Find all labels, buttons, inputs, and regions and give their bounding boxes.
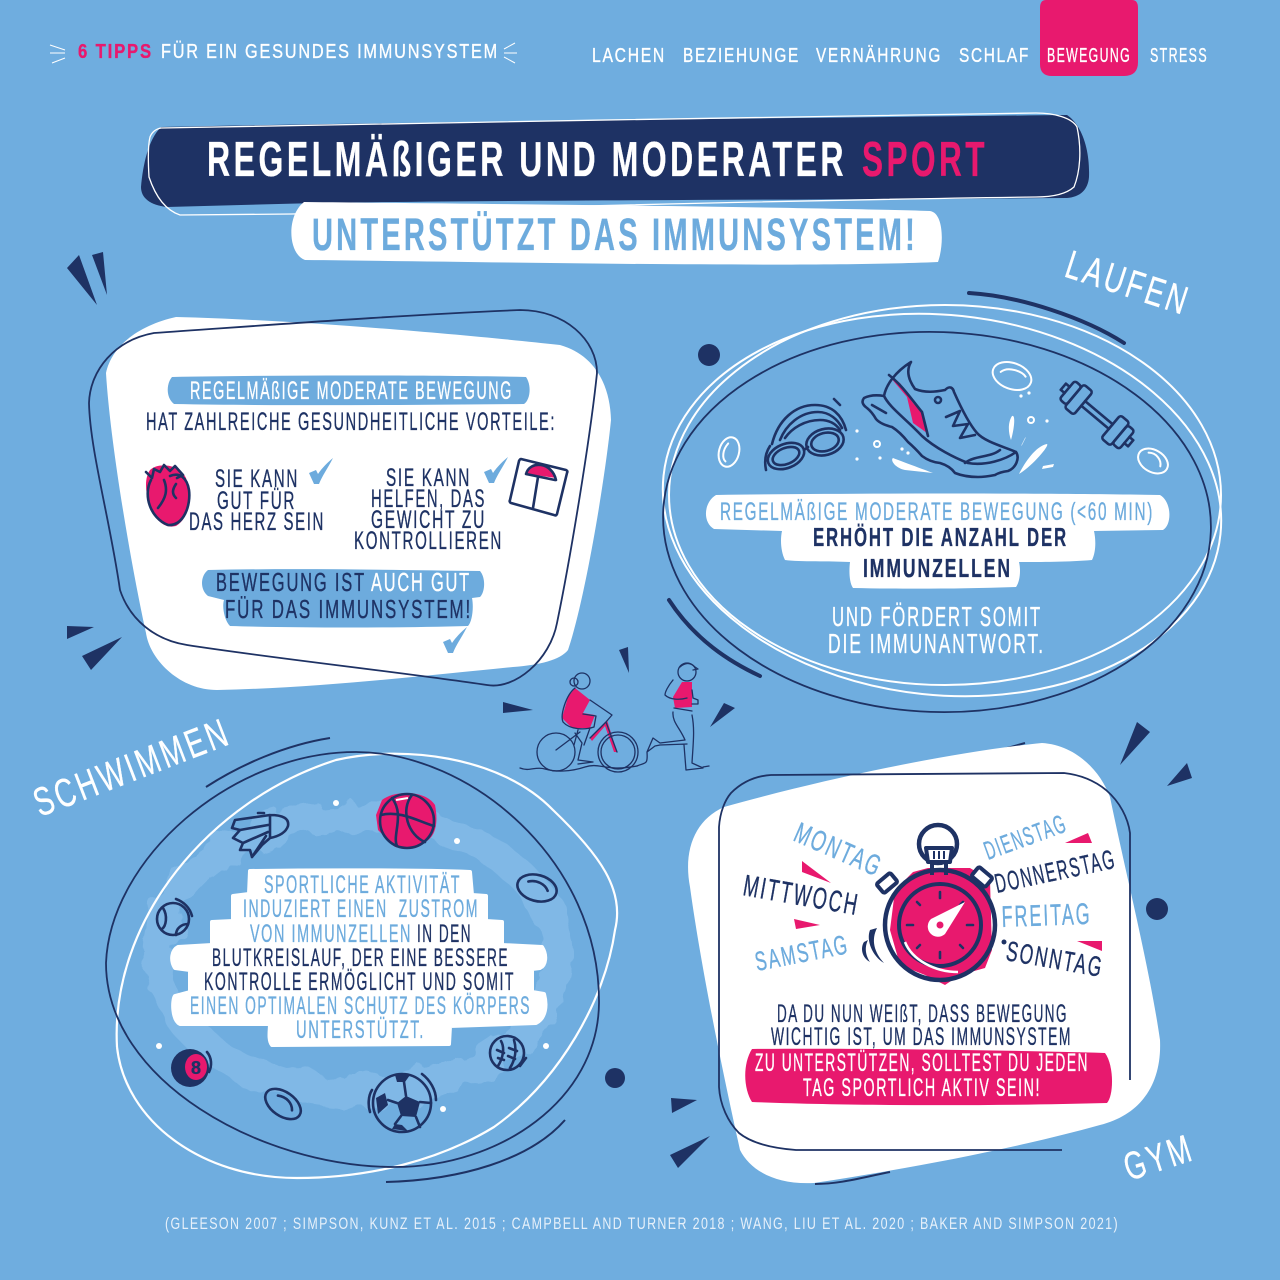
icon: shuttlecock (232, 813, 288, 857)
label: Laufen: LAUFEN (1060, 243, 1196, 324)
text block: white steps: SPORTLICHE AKTIVITÄT (264, 871, 461, 899)
panel outline (719, 773, 1130, 1150)
closing text (771, 1000, 1072, 1051)
text: heart benefit: SIE KANN (215, 465, 299, 493)
highlighted heading: REGELMÄßIGE MODERATE BEWEGUNG (190, 377, 513, 405)
panel shape: white blob (688, 743, 1160, 1183)
highlighted message (202, 567, 484, 628)
text block: white steps: IN DEN (417, 920, 472, 948)
subtitle: UNTERSTÜTZT DAS IMMUNSYSTEM! (312, 209, 918, 260)
icon: blood cell (260, 1083, 306, 1125)
navigation tabs: STRESS (1150, 45, 1208, 67)
text block: white steps (172, 870, 545, 1045)
text block: white steps: BLUTKREISLAUF, DER EINE BESSERE (212, 944, 509, 972)
panel: immune cells (644, 287, 1240, 723)
navigation tabs: BEWEGUNG (1047, 45, 1131, 67)
navigation tabs: LACHEN (592, 45, 666, 67)
text: weight benefit: KONTROLLIEREN (354, 527, 503, 555)
mottled ring (158, 817, 558, 1093)
icon: basketball (376, 793, 436, 848)
panel: every day (688, 743, 1160, 1184)
decorative dots (605, 344, 1168, 1088)
highlighted message: BEWEGUNG IST (216, 567, 366, 597)
header: series title: 6 TIPPS (78, 41, 153, 63)
weekday labels: MONTAG (789, 817, 887, 884)
icon: goggles (764, 399, 847, 474)
title banner (141, 113, 1089, 215)
icon: blood cells (715, 357, 1172, 479)
icon: check mark (309, 458, 333, 484)
dot (1002, 940, 1006, 944)
navigation tabs: VERNÄHRUNG (816, 45, 942, 67)
outline peeking behind blob (815, 743, 1025, 1184)
icon: check mark (443, 627, 467, 653)
icon: soccer ball (369, 1074, 436, 1132)
panel outline (89, 310, 597, 686)
text block: white steps: UNTERSTÜTZT. (296, 1016, 425, 1044)
panel outlines (106, 738, 617, 1182)
icon: splash marks (855, 391, 1054, 474)
runner (637, 663, 709, 770)
text block: white steps: EINEN OPTIMALEN SCHUTZ DES KÖRPERS (190, 992, 531, 1020)
text: highlight line: IMMUNZELLEN (863, 553, 1012, 583)
title banner: SPORT (862, 133, 988, 187)
pink callout: TAG SPORTLICH AKTIV SEIN! (803, 1074, 1041, 1102)
icon: check mark (484, 457, 508, 483)
text: weight benefit (354, 464, 503, 555)
text block: white steps: VON IMMUNZELLEN (250, 920, 412, 948)
panel: benefits (89, 310, 611, 690)
text: consequence: DIE IMMUNANTWORT. (828, 628, 1045, 659)
weekday labels: DIENSTAG (980, 808, 1071, 866)
highlighted message: AUCH GUT (371, 567, 471, 597)
icon: dumbbell (1054, 375, 1140, 455)
icon: eight ball: 8 (191, 1058, 203, 1078)
pink callout (745, 1049, 1112, 1105)
panel: immune flow (106, 738, 617, 1182)
navigation tabs: SCHLAF (959, 45, 1030, 67)
icon: heart (146, 465, 189, 527)
icon: running shoe (863, 362, 1018, 477)
text: consequence: UND FÖRDERT SOMIT (832, 601, 1042, 632)
text: heart benefit: GUT FÜR (217, 487, 296, 515)
text: weight benefit: SIE KANN (386, 464, 471, 492)
icon: blood cell (514, 870, 560, 906)
text block: white steps: INDUZIERT EINEN ZUSTROM (243, 895, 479, 923)
weekday labels: MITTWOCH (741, 869, 862, 922)
header: series title: FÜR EIN GESUNDES IMMUNSYSTEM (161, 41, 499, 63)
icon: scale (510, 459, 567, 515)
subtitle (291, 202, 942, 265)
text: highlight line: ERHÖHT DIE ANZAHL DER (813, 522, 1068, 552)
weekday labels: SONNTAG (1004, 935, 1106, 983)
title banner: REGELMÄßIGER UND MODERATER (207, 133, 847, 187)
decorative triangles top left (67, 252, 107, 305)
text: heart benefit: DAS HERZ SEIN (189, 508, 325, 536)
label: Gym: GYM (1118, 1127, 1199, 1190)
decorative triangles left (67, 626, 122, 670)
text: highlight line (706, 494, 1169, 589)
icon: stopwatch (862, 825, 995, 985)
decorative triangles right (1120, 722, 1192, 786)
panel outlines (644, 287, 1240, 723)
panel shape: white blob (106, 317, 611, 690)
heading line: HAT ZAHLREICHE GESUNDHEITLICHE VORTEILE: (146, 408, 556, 436)
text block: white steps: KONTROLLE ERMÖGLICHT UND SOMIT (204, 968, 515, 996)
illustration: cyclist and runner (520, 663, 709, 772)
pink accent triangles (794, 833, 1102, 951)
icon: tennis ball (157, 899, 192, 935)
navigation tabs: BEZIEHUNGE (683, 45, 800, 67)
text: weight benefit: GEWICHT ZU (371, 506, 486, 534)
icon: eight ball (171, 1049, 211, 1087)
text: weight benefit: HELFEN, DAS (371, 485, 486, 513)
highlighted message: FÜR DAS IMMUNSYSTEM! (225, 594, 472, 624)
weekday labels: SAMSTAG (752, 929, 851, 977)
text: heart benefit (189, 465, 325, 536)
label: Schwimmen: SCHWIMMEN (27, 710, 236, 825)
highlighted heading (168, 376, 530, 405)
decorative triangles centre (503, 647, 735, 727)
cyclist (520, 673, 638, 772)
icon: baseball (490, 1036, 526, 1070)
weekday labels (741, 808, 1119, 983)
white dots (156, 800, 549, 1112)
navigation tabs (592, 0, 1208, 76)
decorative triangles bottom (670, 1098, 710, 1168)
weekday labels: FREITAG (1001, 898, 1092, 934)
weekday labels: DONNERSTAG (992, 844, 1119, 899)
header: series title (50, 41, 517, 63)
text: consequence (828, 601, 1045, 659)
